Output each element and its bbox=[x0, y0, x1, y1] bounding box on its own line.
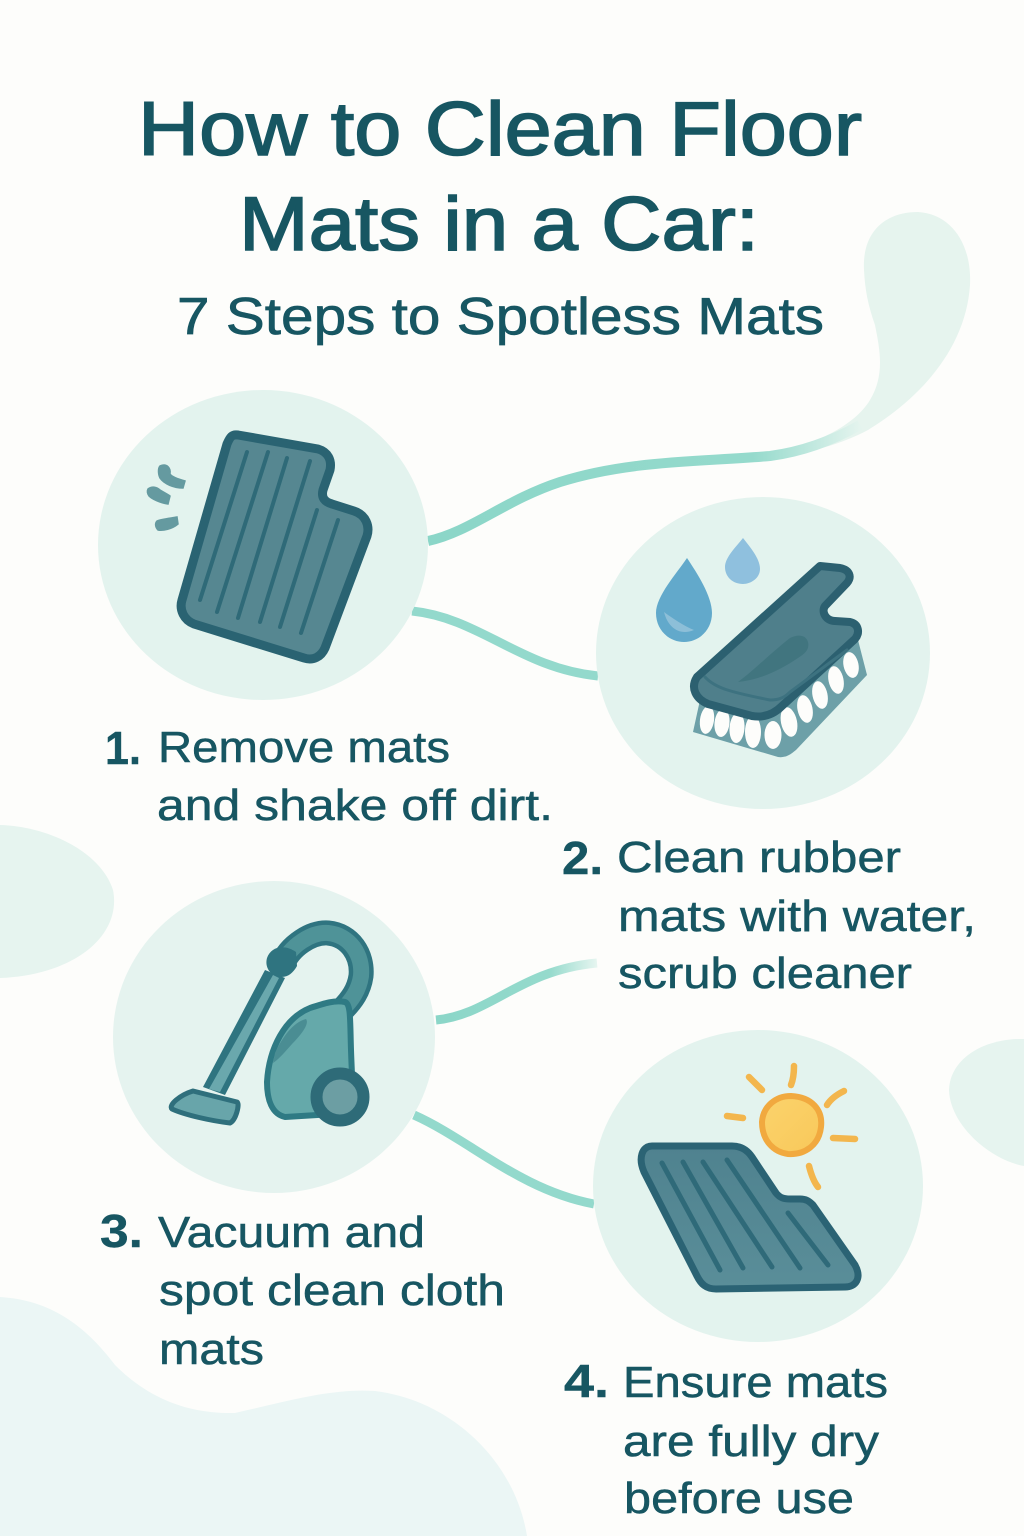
step 4 text: 4. bbox=[564, 1355, 609, 1407]
step 4 text bbox=[564, 1355, 888, 1523]
decorative blob: bottom left bbox=[0, 1297, 527, 1536]
icon: drying mat bbox=[641, 1146, 858, 1289]
step 4 text: before use bbox=[624, 1474, 854, 1523]
icon: scrub brush bbox=[693, 566, 867, 757]
body bbox=[267, 1001, 352, 1117]
step 3 text: 3. bbox=[100, 1205, 143, 1257]
step 1 text: 1. bbox=[105, 722, 141, 774]
step 3 text: mats bbox=[159, 1325, 264, 1374]
connector: step 2 to step 3 bbox=[436, 963, 597, 1020]
title: How to Clean Floor bbox=[138, 87, 862, 172]
icon: floor mat with dirt bbox=[147, 435, 368, 659]
connector: step 3 to step 4 bbox=[414, 1115, 594, 1204]
wheel bbox=[316, 1074, 364, 1120]
decorative swoosh: top right bbox=[770, 212, 970, 460]
mat grooves bbox=[662, 1160, 828, 1270]
step 2 text: scrub cleaner bbox=[618, 949, 912, 998]
step 1 text: Remove mats bbox=[158, 723, 450, 772]
step 1 text: and shake off dirt. bbox=[157, 781, 553, 830]
step 4 text: Ensure mats bbox=[623, 1358, 888, 1407]
wand bbox=[203, 970, 285, 1095]
panel: step 3 circle bbox=[113, 881, 435, 1193]
decorative blob: right bbox=[949, 1039, 1024, 1166]
title: Mats in a Car: bbox=[239, 182, 759, 267]
icon: vacuum cleaner bbox=[171, 933, 364, 1123]
panel: step 4 circle bbox=[593, 1030, 923, 1342]
step 2 text bbox=[562, 832, 976, 998]
hose bbox=[282, 933, 361, 1010]
connector: step 1 to top swoosh bbox=[428, 425, 860, 541]
icon: water drops bbox=[656, 538, 760, 642]
step 3 text: Vacuum and bbox=[158, 1208, 425, 1257]
handle slot bbox=[738, 636, 808, 682]
step 4 text: are fully dry bbox=[623, 1417, 879, 1466]
step 3 text bbox=[100, 1205, 505, 1374]
connector: step 1 to step 2 bbox=[412, 611, 598, 676]
step 1 text bbox=[105, 722, 553, 830]
hose collar bbox=[266, 947, 297, 977]
nozzle bbox=[171, 1091, 238, 1123]
step 3 text: spot clean cloth bbox=[159, 1266, 505, 1315]
step 2 text: 2. bbox=[562, 832, 603, 884]
panel: step 1 circle bbox=[98, 390, 428, 700]
icon: sun bbox=[727, 1066, 855, 1187]
subtitle: 7 Steps to Spotless Mats bbox=[177, 288, 824, 346]
step 2 text: Clean rubber bbox=[617, 833, 901, 882]
step 2 text: mats with water, bbox=[618, 892, 976, 941]
body highlight bbox=[273, 1019, 307, 1063]
panel: step 2 circle bbox=[596, 497, 930, 809]
decorative blob: left bbox=[0, 825, 114, 978]
brush bristles bbox=[693, 640, 867, 757]
mat grooves bbox=[200, 452, 338, 633]
title bbox=[138, 87, 862, 267]
dirt flecks bbox=[147, 465, 185, 530]
handle inner edge bbox=[705, 650, 847, 700]
